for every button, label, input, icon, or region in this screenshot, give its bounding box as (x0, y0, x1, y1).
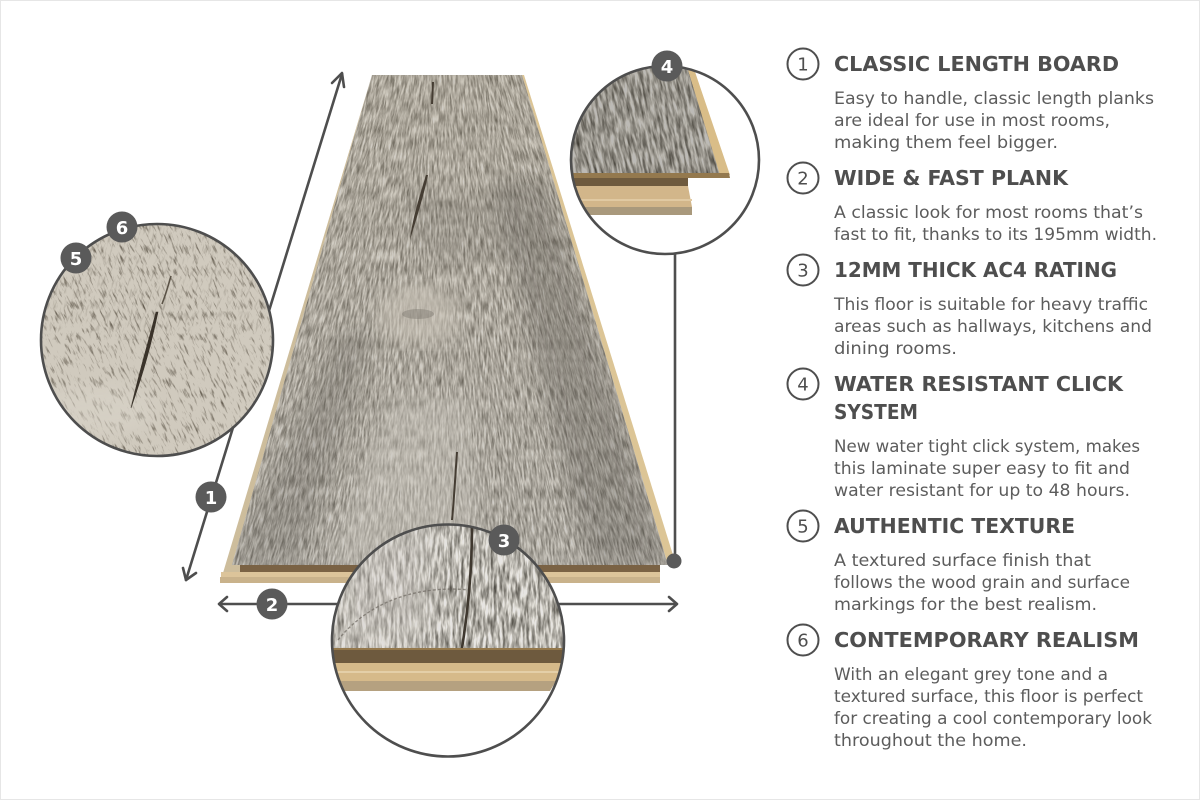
heading 4: SYSTEM (834, 400, 918, 424)
plank wood grain (232, 75, 668, 565)
number 2 (788, 162, 818, 194)
badge 3: 3 (498, 531, 510, 552)
magnifier: surface texture (40, 222, 274, 458)
badge 5 (60, 242, 92, 274)
width arrow (219, 597, 677, 611)
badge 2: 2 (266, 595, 278, 616)
text 5: A textured surface finish that (834, 551, 1092, 570)
bottom joint surface (330, 520, 570, 648)
badge 2 (256, 588, 288, 620)
length arrow (183, 73, 344, 580)
text 1: are ideal for use in most rooms, (834, 111, 1110, 130)
number 1: 1 (797, 54, 809, 76)
text 2: A classic look for most rooms that’s (834, 203, 1143, 222)
dimension callout line (666, 253, 682, 568)
plank base edge (220, 75, 660, 583)
magnifier: bottom joint (330, 520, 570, 756)
heading 6: CONTEMPORARY REALISM (834, 628, 1139, 652)
text 1: making them feel bigger. (834, 133, 1058, 152)
feature 2 (788, 162, 1157, 244)
text 5 (834, 551, 1130, 614)
text 3: This floor is suitable for heavy traffic (833, 295, 1148, 314)
number 5 (788, 510, 818, 542)
text 3: areas such as hallways, kitchens and (834, 317, 1152, 336)
badge 6: 6 (116, 218, 128, 239)
number 6: 6 (797, 630, 809, 652)
number 1 (788, 48, 818, 80)
badge 1: 1 (205, 488, 217, 509)
text 6: With an elegant grey tone and a (834, 665, 1108, 684)
number 2: 2 (797, 168, 809, 190)
badge 4: 4 (661, 57, 673, 78)
text 3 (833, 295, 1152, 358)
heading 3: 12MM THICK AC4 RATING (834, 258, 1117, 282)
text 4 (834, 437, 1140, 500)
badge 6 (106, 212, 138, 242)
text 4: water resistant for up to 48 hours. (834, 481, 1130, 500)
number 6 (788, 624, 818, 656)
plank (208, 75, 692, 583)
heading 4: WATER RESISTANT CLICK (834, 372, 1125, 396)
plank tonal patches (232, 82, 668, 565)
heading 2: WIDE & FAST PLANK (834, 166, 1070, 190)
feature 1 (788, 48, 1154, 152)
number 3: 3 (797, 260, 809, 282)
text 6: throughout the home. (834, 731, 1027, 750)
bottom joint layers (334, 650, 562, 663)
click surface (572, 68, 720, 173)
text 6: for creating a cool contemporary look (834, 709, 1152, 728)
text 1: Easy to handle, classic length planks (834, 89, 1154, 108)
number 3 (788, 254, 818, 286)
badge 3 (488, 524, 520, 556)
magnifier: click system (570, 66, 760, 256)
heading 4 (834, 372, 1125, 424)
badge 4 (652, 50, 682, 82)
heading 1: CLASSIC LENGTH BOARD (834, 52, 1119, 76)
text 3: dining rooms. (834, 339, 957, 358)
feature 4 (788, 368, 1140, 500)
badge 1 (196, 482, 226, 512)
knot crack (131, 312, 158, 408)
plank tongue band (240, 565, 660, 572)
text 4: this laminate super easy to fit and (834, 459, 1130, 478)
feature 3 (788, 254, 1152, 358)
plank right edge (522, 75, 673, 565)
text 6 (834, 665, 1152, 750)
text 5: follows the wood grain and surface (834, 573, 1130, 592)
plank cracks (410, 82, 458, 520)
number 5: 5 (797, 516, 809, 538)
text 2: fast to fit, thanks to its 195mm width. (834, 225, 1157, 244)
click layers (570, 173, 730, 178)
text 4: New water tight click system, makes (834, 437, 1140, 456)
number 4 (788, 368, 818, 400)
feature 6 (788, 624, 1152, 750)
text 1 (834, 89, 1154, 152)
text 6: textured surface, this floor is perfect (834, 687, 1144, 706)
number 4: 4 (797, 374, 809, 396)
heading 5: AUTHENTIC TEXTURE (834, 514, 1075, 538)
badge 5: 5 (70, 249, 82, 270)
click edge (688, 70, 730, 175)
text 5: markings for the best realism. (834, 595, 1097, 614)
text 2 (834, 203, 1157, 244)
plank top surface (232, 75, 668, 565)
feature 5 (788, 510, 1130, 614)
